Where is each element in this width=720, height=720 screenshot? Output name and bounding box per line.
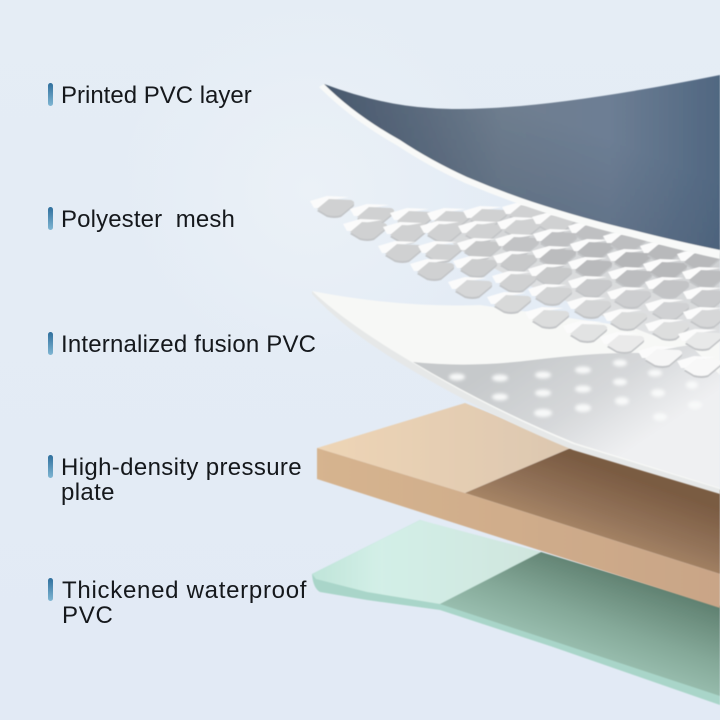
label: thickened waterproof PVC: Thickened waterproof	[62, 577, 307, 604]
label: high-density pressure plate: plate	[61, 479, 115, 506]
label: thickened waterproof PVC	[48, 577, 307, 629]
label: internalized fusion PVC: Internalized fusion PVC	[61, 331, 316, 358]
label: polyester mesh: Polyester mesh	[61, 206, 235, 233]
shadow and light dots	[413, 345, 720, 488]
layer: printed PVC	[319, 75, 720, 259]
layer: thickened waterproof PVC	[312, 520, 720, 705]
layer: polyester mesh	[310, 196, 720, 378]
label: thickened waterproof PVC: PVC	[62, 602, 114, 629]
label: high-density pressure plate: High-density pressure	[61, 454, 302, 481]
label: printed PVC layer: Printed PVC layer	[61, 82, 252, 109]
mesh backing	[430, 205, 720, 338]
layer: internalized fusion PVC	[312, 291, 720, 494]
label: high-density pressure plate	[48, 454, 302, 506]
layer: high-density pressure plate	[317, 403, 720, 608]
